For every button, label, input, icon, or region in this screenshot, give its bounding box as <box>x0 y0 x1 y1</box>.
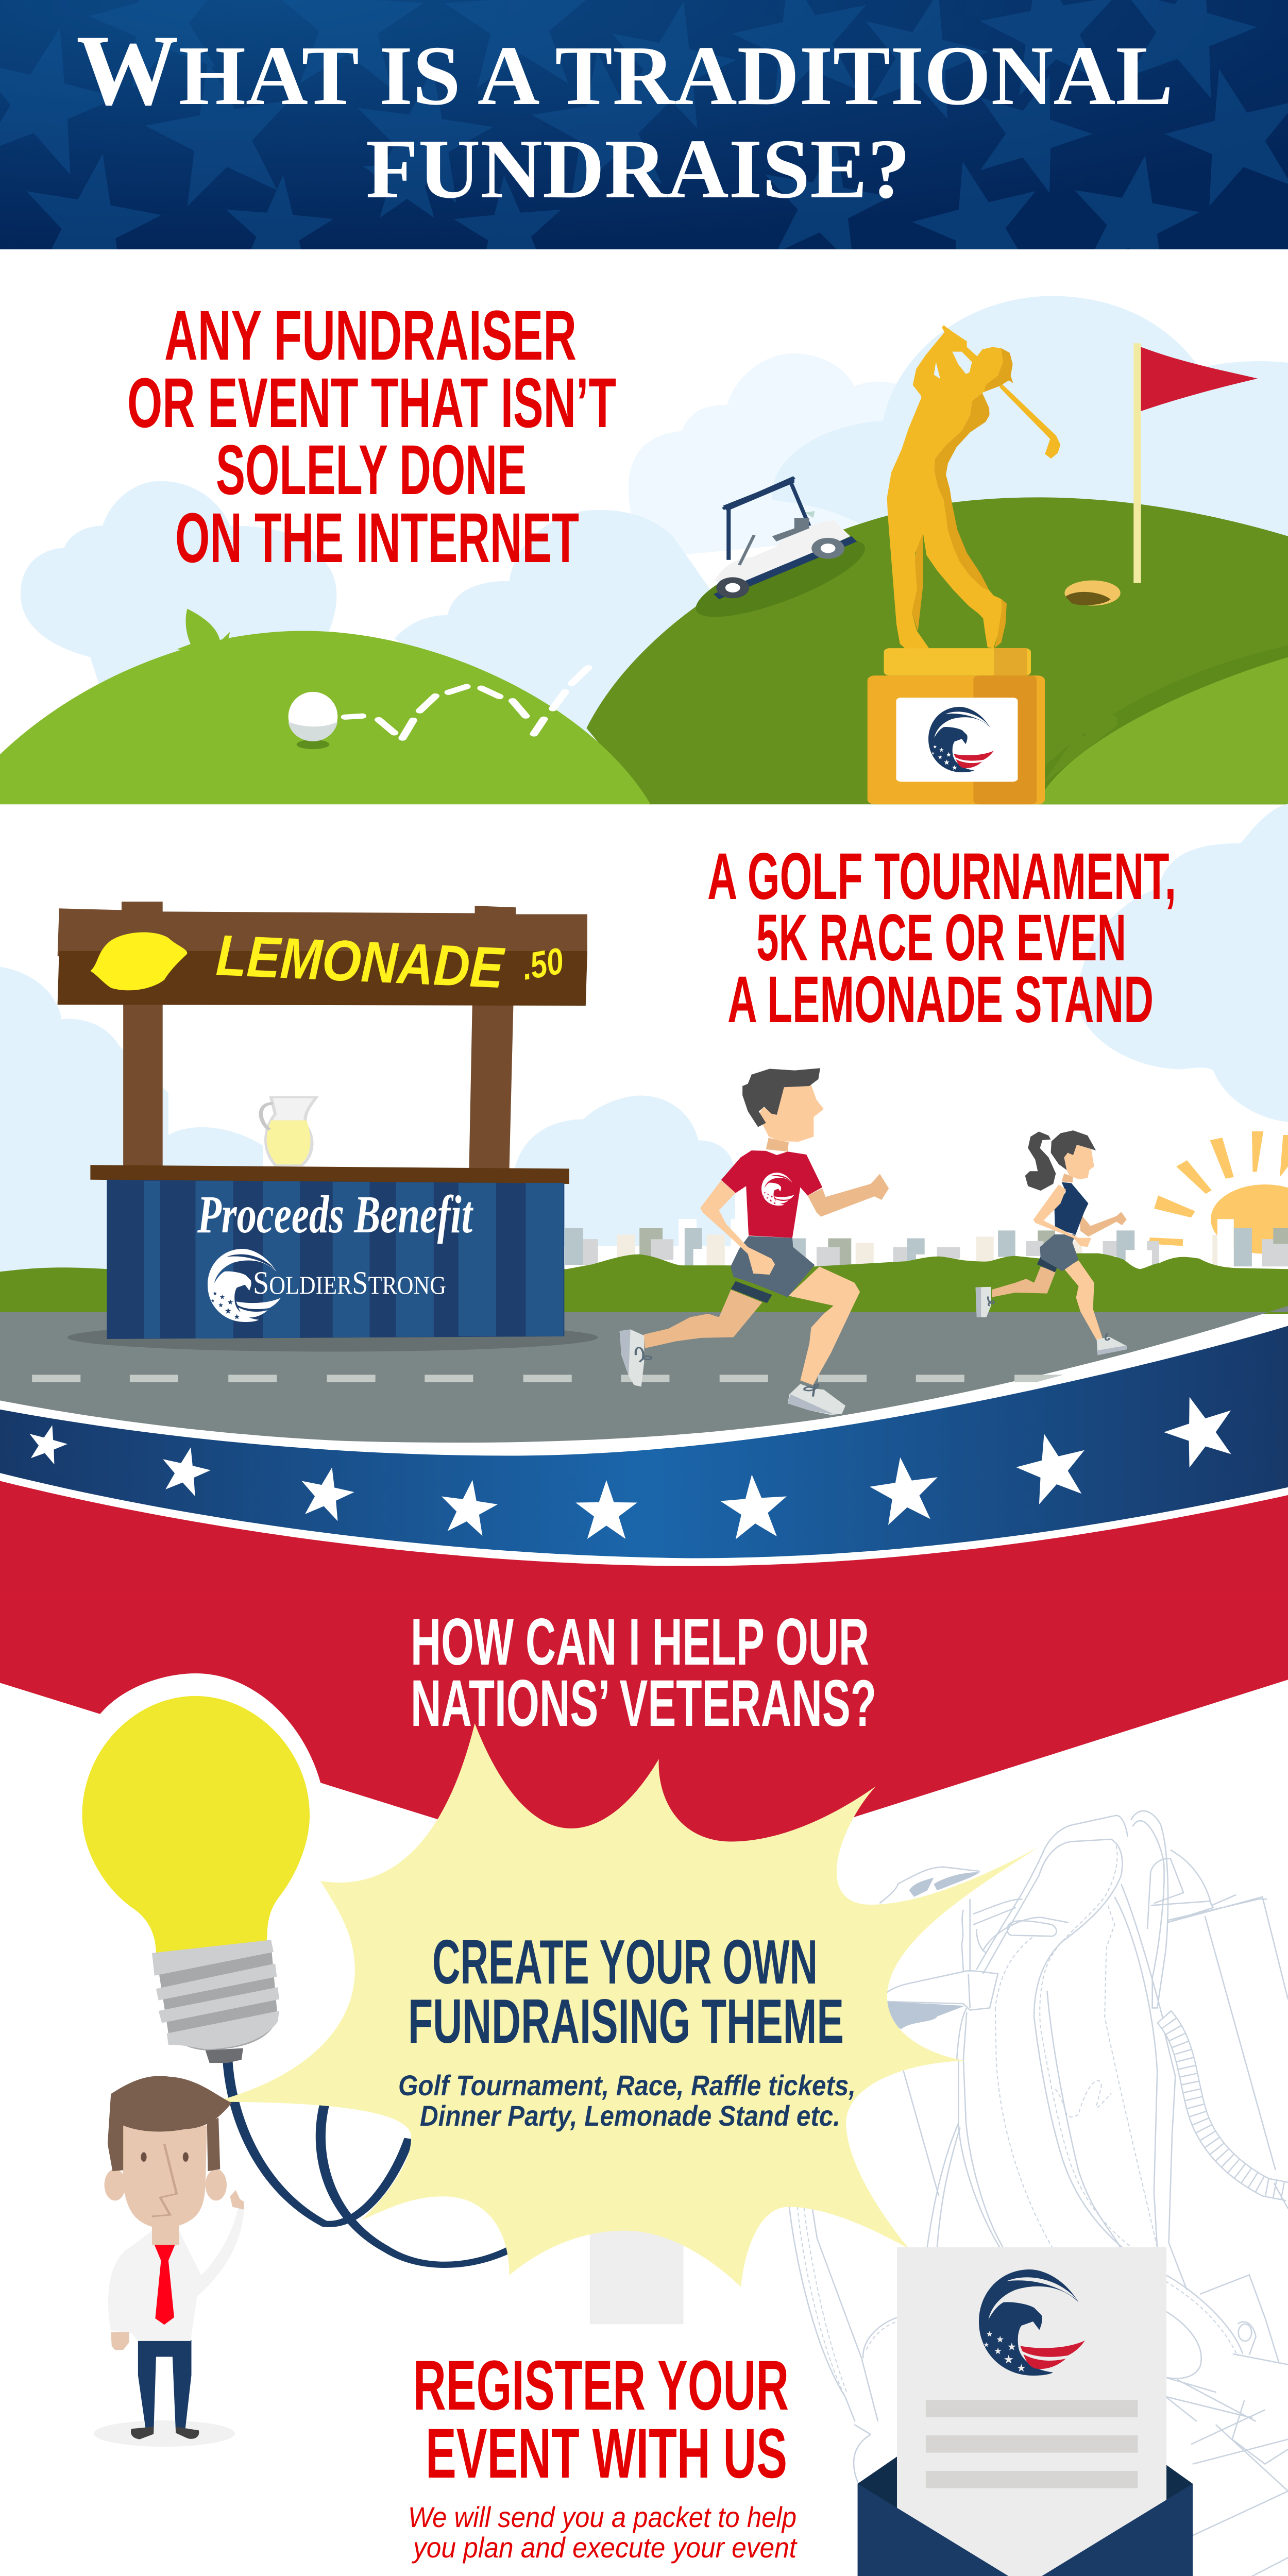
text: packet note <box>408 2501 798 2564</box>
text: any fundraiser <box>127 296 616 578</box>
far hill <box>586 497 1288 804</box>
text: create your own fundraising theme: CREATE YOUR OWN <box>432 1927 818 1997</box>
text: packet note: We will send you a packet to help <box>408 2501 796 2533</box>
female runner <box>976 1130 1127 1355</box>
road dashes <box>32 1375 1064 1382</box>
sign text: lemonade: LEMONADE <box>215 923 506 1000</box>
sign text: lemonade: .50 <box>519 940 567 988</box>
title <box>76 14 1173 216</box>
text: a golf tournament <box>707 840 1176 1037</box>
speech burst <box>214 1723 1039 2287</box>
ribbon stars <box>24 1386 1244 1540</box>
text: register your event <box>413 2346 789 2493</box>
panel: golf scene <box>0 296 1288 804</box>
heading: how can i help: NATIONS’ VETERANS? <box>411 1667 876 1740</box>
logo: trophy card <box>928 707 994 772</box>
near right hill <box>1043 646 1288 804</box>
sun <box>1148 1131 1288 1254</box>
red banner <box>0 1481 1288 1640</box>
grass tuft right <box>1043 707 1117 783</box>
clouds <box>21 296 1288 747</box>
text: theme examples: Dinner Party, Lemonade Stand etc. <box>420 2099 840 2132</box>
heading: how can i help <box>411 1605 876 1740</box>
red banner point <box>0 1595 1288 1884</box>
panel: header banner <box>0 0 1288 249</box>
stand text: soldierstrong: SOLDIERSTRONG <box>253 1264 446 1301</box>
clouds <box>0 804 1288 1272</box>
golf hole <box>1064 581 1121 606</box>
text: any fundraiser: ANY FUNDRAISER <box>164 296 577 375</box>
far-left and far-right skyline <box>565 1219 1288 1266</box>
text: any fundraiser: ON THE INTERNET <box>175 499 579 578</box>
ball path dashes <box>345 668 588 738</box>
background: exoskeleton line drawing <box>670 1811 1288 2576</box>
male runner <box>620 1068 889 1415</box>
golfer trophy <box>887 325 1060 648</box>
text: register your event: EVENT WITH US <box>426 2414 787 2493</box>
logo: envelope letter <box>979 2269 1085 2376</box>
flag <box>1133 343 1258 583</box>
light bulb <box>82 1696 511 2265</box>
title: WHAT IS A TRADITIONAL <box>76 14 1173 126</box>
text: create your own fundraising theme <box>408 1927 844 2056</box>
logo: stand <box>208 1249 281 1322</box>
title: FUNDRAISE? <box>366 122 910 216</box>
skyline <box>592 1219 1159 1267</box>
text: theme examples: Golf Tournament, Race, Raffle tickets, <box>398 2069 856 2102</box>
left hill <box>0 631 651 804</box>
bulb halo <box>51 1673 345 1976</box>
character: man in tie <box>94 2076 244 2447</box>
background stars <box>0 0 1288 249</box>
road <box>0 1306 1288 1443</box>
text: register your event: REGISTER YOUR <box>413 2346 789 2425</box>
golf ball <box>289 692 337 749</box>
text: any fundraiser: SOLELY DONE <box>216 431 527 510</box>
trophy pedestal <box>868 648 1045 804</box>
panel: how can i help <box>0 1595 1288 2447</box>
heading: how can i help: HOW CAN I HELP OUR <box>411 1605 869 1679</box>
stand text: proceeds benefit: Proceeds Benefit <box>197 1185 473 1244</box>
panel: register step <box>80 2247 1288 2576</box>
runners <box>620 1068 1127 1415</box>
pitcher <box>261 1097 316 1165</box>
patriotic blue ribbon <box>0 1326 1288 1558</box>
envelope <box>858 2247 1193 2576</box>
golf cart <box>680 478 881 630</box>
lemonade stand <box>58 902 598 1351</box>
lemon <box>90 932 188 990</box>
grass tuft left <box>177 609 230 654</box>
panel: lemonade stand and runners scene <box>0 804 1288 1640</box>
green hedge <box>0 1253 1288 1314</box>
text: theme examples <box>398 2069 856 2132</box>
text: create your own fundraising theme: FUNDRAISING THEME <box>408 1986 844 2056</box>
text: any fundraiser: OR EVENT THAT ISN’T <box>127 364 616 443</box>
gray path connector <box>590 2223 684 2324</box>
text: packet note: you plan and execute your event <box>411 2531 798 2564</box>
logo: runner shirt <box>761 1173 794 1206</box>
